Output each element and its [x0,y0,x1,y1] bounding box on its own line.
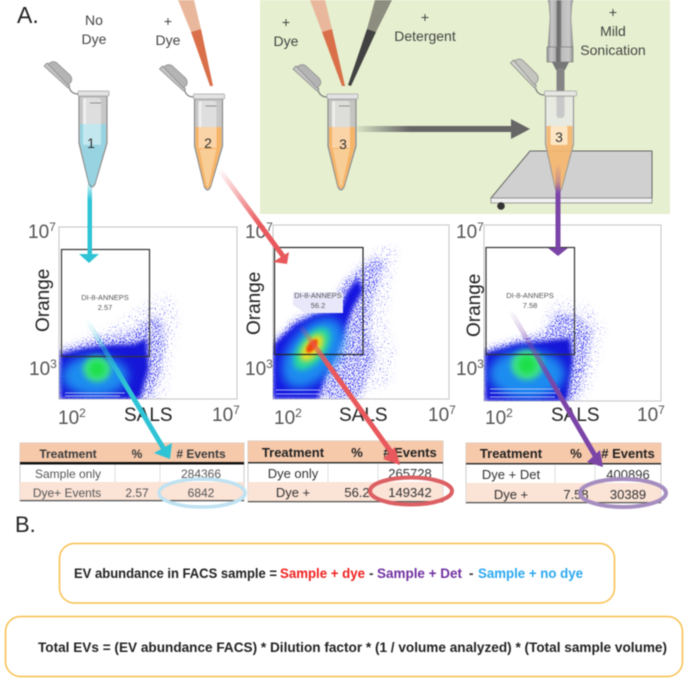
table 2 header [262,445,437,460]
table 2 rows: 265728 [388,466,432,481]
panel: EV abundance formula [60,544,614,603]
table 1 rows: 2.57 [125,486,149,500]
axis title SALS: SALS [551,405,600,426]
label: plus detergent: Detergent [394,28,456,44]
table 2 rows: 149342 [388,485,432,500]
label: plus dye, tube 2: Dye [156,32,181,48]
callout: circled dye count [370,478,452,504]
label: panel A: A. [17,2,39,28]
axis labels: 10 [58,408,79,429]
arrow: tube 3 to plot 3 [548,164,568,256]
label: plus mild sonication [580,4,646,58]
gate label [294,291,342,310]
formula text: - [469,566,474,581]
label: plus mild sonication: Sonication [580,42,646,58]
icon: tube 3 with dye and detergent [293,65,358,190]
table 3 rows: 400896 [606,467,650,482]
label: plus dye, tube 2 [156,13,181,48]
table 2 rows [268,466,432,500]
axis labels [245,220,456,429]
table 2 header: % [351,445,363,460]
icon: pipette tip over tube 3 [310,0,345,86]
table 1 rows: 6842 [188,486,215,500]
chart: scatter plot no dye [28,220,240,429]
tube number 3: 3 [339,136,347,152]
axis labels: 10 [212,405,233,426]
label: plus dye, tube 2: + [164,13,172,29]
axis labels: 2 [295,406,302,420]
table 2 rows: 56.2 [344,485,370,500]
axis title Orange: Orange [464,274,485,337]
gate label [506,291,554,310]
axis labels: 10 [28,222,49,243]
axis labels: 10 [637,405,658,426]
axis title Orange: Orange [33,269,54,332]
axis labels: 3 [50,357,57,371]
formula text: - [369,566,374,581]
gate box [486,248,574,354]
label backdrop [293,292,343,313]
icon: tube 2 with dye [160,65,224,190]
tube number 2: 2 [204,135,212,151]
table 3 header [480,446,655,461]
table 3 rows: Dye + [494,487,528,502]
arrow: gray process arrow [357,119,530,139]
label: plus mild sonication: Mild [600,23,626,39]
axis title SALS: SALS [124,405,173,426]
label: plus dye, tube 3: + [282,14,290,30]
table 1 rows: Sample only [35,467,101,481]
callout: circled no dye count [159,479,245,507]
gate box [274,248,363,354]
axis labels: 2 [79,406,86,420]
axis labels: 10 [245,222,266,243]
table 3 header: Treatment [480,446,543,461]
axis labels [456,220,665,429]
gate label: DI-8-ANNEPS [294,291,342,300]
arrow: plot 1 to table 1 [87,320,172,459]
label: plus detergent: + [421,9,429,25]
table 1 header [39,447,226,461]
table: no dye events [20,443,244,501]
formula text: EV abundance in FACS sample = [74,566,277,581]
axis labels: 2 [506,406,513,420]
axis title SALS: SALS [339,405,388,426]
gate label: 7.58 [523,301,537,310]
table 1 rows [33,467,221,500]
label: panel B: B. [15,512,36,537]
label: plus dye, tube 3 [274,14,299,49]
gate label: 2.57 [98,303,112,312]
axis labels [28,220,240,429]
axis labels: 10 [485,408,506,429]
axis labels: 7 [477,220,484,234]
table 3 rows: 30389 [610,487,646,502]
arrow: tube 1 to plot 1 [79,184,99,263]
gate label: DI-8-ANNEPS [81,293,129,302]
table: dye and detergent events [466,443,661,503]
chart: scatter plot dye and detergent [456,220,665,429]
label: no dye: Dye [82,31,107,47]
axis labels: 10 [29,359,50,380]
axis labels: 10 [456,359,477,380]
table 1 header: Treatment [39,447,97,461]
axis labels: 7 [49,220,56,234]
axis labels: 10 [456,222,477,243]
callout: circled detergent count [580,479,666,507]
arrow: plot 2 to table 2 [301,327,400,465]
axis labels: 10 [274,408,295,429]
table 1 rows: 284366 [181,467,221,481]
gate label: DI-8-ANNEPS [506,291,554,300]
arrow: tube 2 to plot 2 [219,169,289,264]
axis labels: 7 [449,403,456,417]
table 1 header: # Events [176,447,226,461]
table 3 rows: Dye + Det [482,467,540,482]
tube number 1: 1 [87,135,95,151]
formula text: Sample + dye [280,566,365,581]
axis labels: 3 [266,357,273,371]
table: dye events [248,441,443,502]
label: no dye [82,12,107,47]
table 3 header: % [570,446,582,461]
tube number 3: 3 [555,129,563,145]
icon: pipette tip over tube 2 [178,0,213,86]
gate label: 56.2 [311,301,325,310]
axis labels: 7 [658,403,665,417]
table 3 rows: 7.58 [563,487,589,502]
label: plus dye, tube 3: Dye [274,33,299,49]
axis title Orange: Orange [244,272,265,335]
panel: detergent and sonication background [260,0,670,214]
formula text: Total EVs = (EV abundance FACS) * Dilution factor * (1 / volume analyzed) * (Total sample volume) [38,640,667,655]
gate box [62,250,150,356]
icon: tube 3 under sonication [510,59,576,192]
table 1 rows: Dye+ Events [33,486,101,500]
axis labels: 3 [477,357,484,371]
icon: tube 1 no dye [44,62,109,187]
table 2 header: Treatment [262,445,325,460]
icon: sonicator stage [491,151,652,210]
table 1 header: % [132,447,143,461]
axis labels: 7 [266,220,273,234]
table 3 rows [482,467,650,502]
label: plus mild sonication: + [609,4,617,20]
axis labels: 7 [233,403,240,417]
label: plus detergent [394,9,456,44]
icon: sonicator probe [547,0,573,118]
chart: scatter plot dye [244,220,456,429]
icon: detergent pipette tip [348,0,392,86]
label: no dye: No [85,12,103,28]
panel: total EVs formula [6,616,682,676]
arrow: plot 3 to table 3 [510,310,603,467]
axis labels: 10 [245,359,266,380]
table 3 header: # Events [601,446,655,461]
table 2 rows: Dye only [268,466,319,481]
formula text: Sample + no dye [478,566,583,581]
formula text: Sample + Det [377,566,462,581]
axis labels: 10 [428,405,449,426]
gate label [81,293,129,312]
table 2 header: # Events [383,445,437,460]
table 2 rows: Dye + [276,485,310,500]
